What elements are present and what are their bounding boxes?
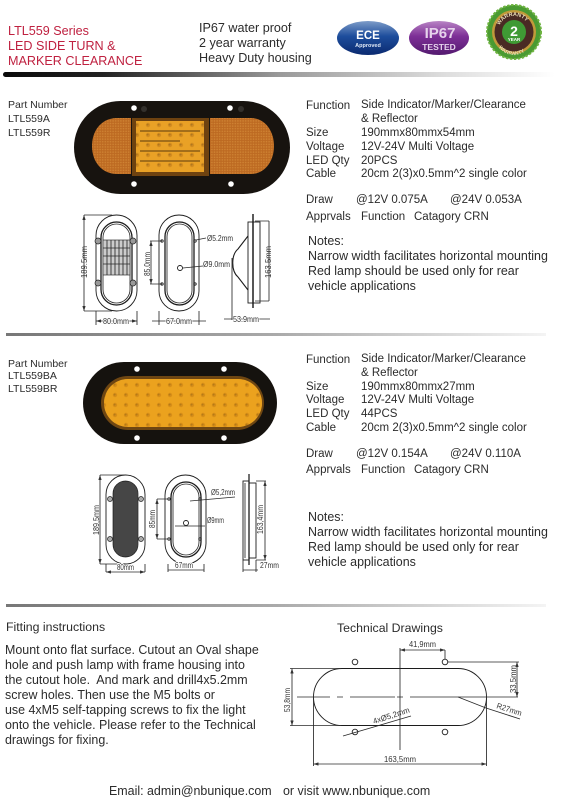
spec table: @24V 0.110A: [450, 448, 521, 460]
part numbers: LTL559R: [8, 127, 51, 139]
text block: fitting instructions: hole and push lamp with frame housing into: [5, 658, 245, 672]
feature list: 2 year warranty: [199, 36, 286, 50]
technical drawing: cutout: 4xØ5,2mm: [372, 706, 411, 726]
title: [8, 24, 142, 68]
text block: fitting instructions: use 4xM5 self-tapping screws to fix the light: [5, 703, 246, 717]
text block: fitting instructions: [5, 643, 259, 747]
part numbers: LTL559BR: [8, 383, 58, 395]
technical drawing: front: [79, 215, 137, 326]
title: MARKER CLEARANCE: [8, 54, 142, 68]
divider: [6, 333, 546, 336]
divider: [6, 604, 546, 607]
part numbers: LTL559BA: [8, 370, 57, 382]
spec table: [306, 99, 527, 223]
spec table: Cable: [306, 422, 336, 434]
spec table: @24V 0.053A: [450, 194, 522, 206]
lamp photo: [74, 101, 290, 194]
badge: IP67 tested: TESTED: [422, 42, 456, 52]
spec table: Size: [306, 127, 328, 139]
panel: LTL559B: [8, 353, 548, 572]
spec table: Voltage: [306, 141, 344, 153]
badge: warranty seal: YEAR: [508, 37, 521, 42]
technical drawing: front: 189.5mm: [79, 246, 89, 278]
badge: warranty seal: WARRANTY: [499, 45, 524, 56]
feature list: Heavy Duty housing: [199, 51, 312, 65]
badge: warranty seal: [486, 4, 542, 60]
technical drawing: mounting: 85mm: [147, 510, 157, 528]
notes: Red lamp should be used only for rear: [308, 540, 519, 554]
technical drawing: front: 80mm: [117, 563, 134, 572]
spec table: Function: [306, 100, 350, 112]
spec table: [306, 353, 527, 476]
spec table: Draw: [306, 194, 334, 206]
lamp photo: [83, 362, 277, 444]
badge: warranty seal: 2: [510, 23, 518, 39]
technical drawing: side: 163,4mm: [255, 505, 265, 534]
technical drawing: cutout: 53,8mm: [283, 688, 292, 712]
spec table: Draw: [306, 448, 334, 460]
technical drawing: cutout: 41,9mm: [409, 640, 436, 649]
spec table: LED Qty: [306, 155, 350, 167]
technical drawing: cutout: [283, 640, 523, 766]
badge: IP67 tested: IP67: [425, 25, 455, 42]
part numbers: Part Number: [8, 358, 68, 370]
spec table: 20cm 2(3)x0.5mm^2 single color: [361, 422, 527, 434]
spec table: 44PCS: [361, 408, 398, 420]
part numbers: [8, 99, 68, 139]
spec table: Function: [361, 211, 405, 223]
technical drawing: mounting: [147, 475, 235, 572]
spec table: 190mmx80mmx27mm: [361, 381, 475, 393]
spec table: 12V-24V Multi Voltage: [361, 394, 474, 406]
text block: fitting instructions: onto the vehicle. Please refer to the Technical: [5, 718, 256, 732]
spec table: Catagory CRN: [414, 464, 489, 476]
footer contact: [109, 784, 430, 798]
technical drawing: cutout: 163,5mm: [384, 755, 416, 764]
spec table: 20cm 2(3)x0.5mm^2 single color: [361, 168, 527, 180]
spec table: Cable: [306, 168, 336, 180]
spec table: & Reflector: [361, 367, 418, 379]
technical drawing: side: 27mm: [260, 561, 279, 570]
technical drawing: mounting: 67mm: [175, 561, 193, 570]
spec table: LED Qty: [306, 408, 350, 420]
spec table: @12V 0.154A: [356, 448, 428, 460]
notes: Notes:: [308, 234, 344, 248]
technical drawing: mounting: [142, 215, 233, 326]
badge: IP67 tested: [409, 21, 469, 55]
notes: Notes:: [308, 510, 344, 524]
technical drawing: mounting: Ø5,2mm: [211, 488, 235, 497]
technical drawing: front: 189,5mm: [91, 505, 101, 535]
text block: fitting instructions: drawings for fixing.: [5, 733, 109, 747]
notes: Narrow width facilitates horizontal mounting: [308, 525, 548, 539]
technical drawing: front: 80.0mm: [103, 316, 129, 326]
title: LTL559 Series: [8, 24, 89, 38]
notes: vehicle applications: [308, 279, 416, 293]
part numbers: [8, 358, 68, 395]
technical drawing: cutout: R27mm: [495, 701, 523, 718]
spec table: Function: [361, 464, 405, 476]
feature list: [199, 21, 312, 65]
spec table: Size: [306, 381, 328, 393]
notes: [308, 510, 548, 569]
technical drawing: mounting: Ø9mm: [207, 516, 224, 525]
technical drawing: mounting: 67.0mm: [166, 316, 192, 326]
badge: warranty seal: WARRANTY: [496, 12, 529, 24]
badge: ECE approved: [337, 21, 399, 55]
technical drawing: cutout: 33,5mm: [509, 665, 518, 693]
title: LED SIDE TURN &: [8, 39, 116, 53]
heading: fitting instructions: Fitting instructions: [6, 620, 105, 634]
notes: vehicle applications: [308, 555, 416, 569]
spec table: Catagory CRN: [414, 211, 489, 223]
footer contact: Email: admin@nbunique.com: [109, 784, 272, 798]
spec table: Voltage: [306, 394, 344, 406]
spec table: Side Indicator/Marker/Clearance: [361, 353, 526, 365]
technical drawing: side: [243, 474, 279, 572]
technical drawing: side: 53.9mm: [233, 314, 259, 324]
text block: fitting instructions: Mount onto flat surface. Cutout an Oval shape: [5, 643, 259, 657]
part numbers: LTL559A: [8, 113, 50, 125]
technical drawing: mounting: Ø9.0mm: [203, 259, 230, 269]
notes: Narrow width facilitates horizontal mounting: [308, 249, 548, 263]
notes: [308, 234, 548, 293]
part numbers: Part Number: [8, 99, 68, 111]
spec table: @12V 0.075A: [356, 194, 428, 206]
panel: LTL559A: [8, 99, 548, 326]
text block: fitting instructions: the cutout hole. And mark and drill4x5.2mm: [5, 673, 248, 687]
spec table: & Reflector: [361, 113, 418, 125]
spec table: 12V-24V Multi Voltage: [361, 141, 474, 153]
feature list: IP67 water proof: [199, 21, 292, 35]
spec table: Apprvals: [306, 464, 351, 476]
technical drawing: side: 163.5mm: [263, 246, 273, 278]
spec table: Apprvals: [306, 211, 351, 223]
badge: ECE approved: Approved: [355, 43, 381, 49]
spec table: 190mmx80mmx54mm: [361, 127, 475, 139]
technical drawing: mounting: Ø5.2mm: [207, 233, 233, 243]
badge: ECE approved: ECE: [356, 30, 380, 42]
technical drawing: front: [91, 475, 145, 572]
header rule: [3, 72, 555, 77]
technical drawing: side: [224, 214, 273, 324]
spec table: Side Indicator/Marker/Clearance: [361, 99, 526, 111]
footer contact: or visit www.nbunique.com: [283, 784, 430, 798]
technical drawing: mounting: 85.0mm: [142, 252, 152, 276]
heading: technical drawings: Technical Drawings: [337, 621, 443, 635]
spec table: Function: [306, 354, 350, 366]
notes: Red lamp should be used only for rear: [308, 264, 519, 278]
spec table: 20PCS: [361, 155, 398, 167]
text block: fitting instructions: screw holes. Then use the M5 bolts or: [5, 688, 215, 702]
